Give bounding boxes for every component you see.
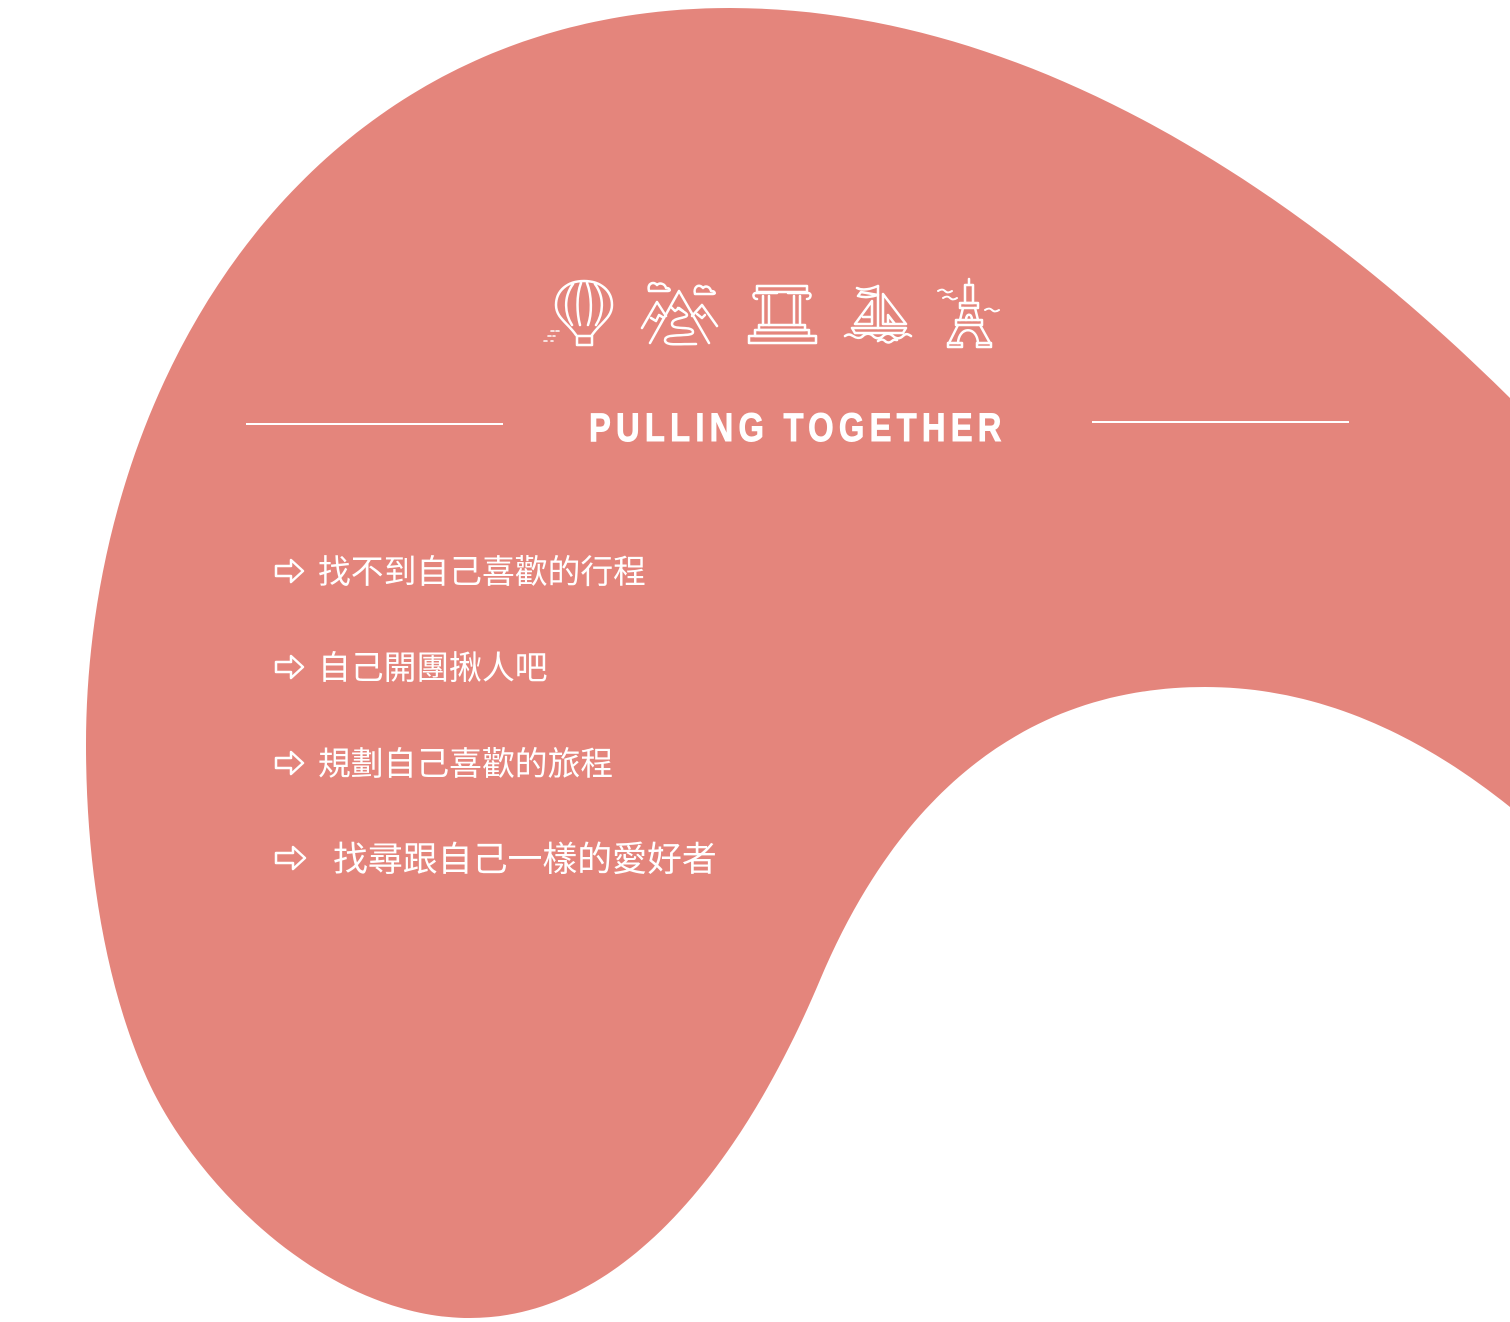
arrow 3 bbox=[276, 752, 303, 774]
list item 4: 找尋跟自己一樣的愛好者 bbox=[333, 840, 717, 879]
icon: greek temple bbox=[749, 286, 816, 343]
icon: mountains bbox=[642, 283, 717, 344]
arrow 2 bbox=[276, 656, 303, 678]
title rule right bbox=[1092, 421, 1349, 423]
arrow 1 bbox=[276, 560, 303, 582]
icon: eiffel tower bbox=[938, 279, 999, 347]
icon: hot air balloon bbox=[544, 281, 612, 345]
arrow 4 bbox=[276, 847, 305, 869]
list item 1: 找不到自己喜歡的行程 bbox=[318, 553, 646, 590]
list item 3: 規劃自己喜歡的旅程 bbox=[318, 745, 613, 782]
list item 2: 自己開團揪人吧 bbox=[318, 649, 548, 686]
icon: sailboat bbox=[845, 286, 911, 342]
title rule left bbox=[246, 423, 503, 425]
title: PULLING TOGETHER bbox=[589, 405, 1001, 450]
